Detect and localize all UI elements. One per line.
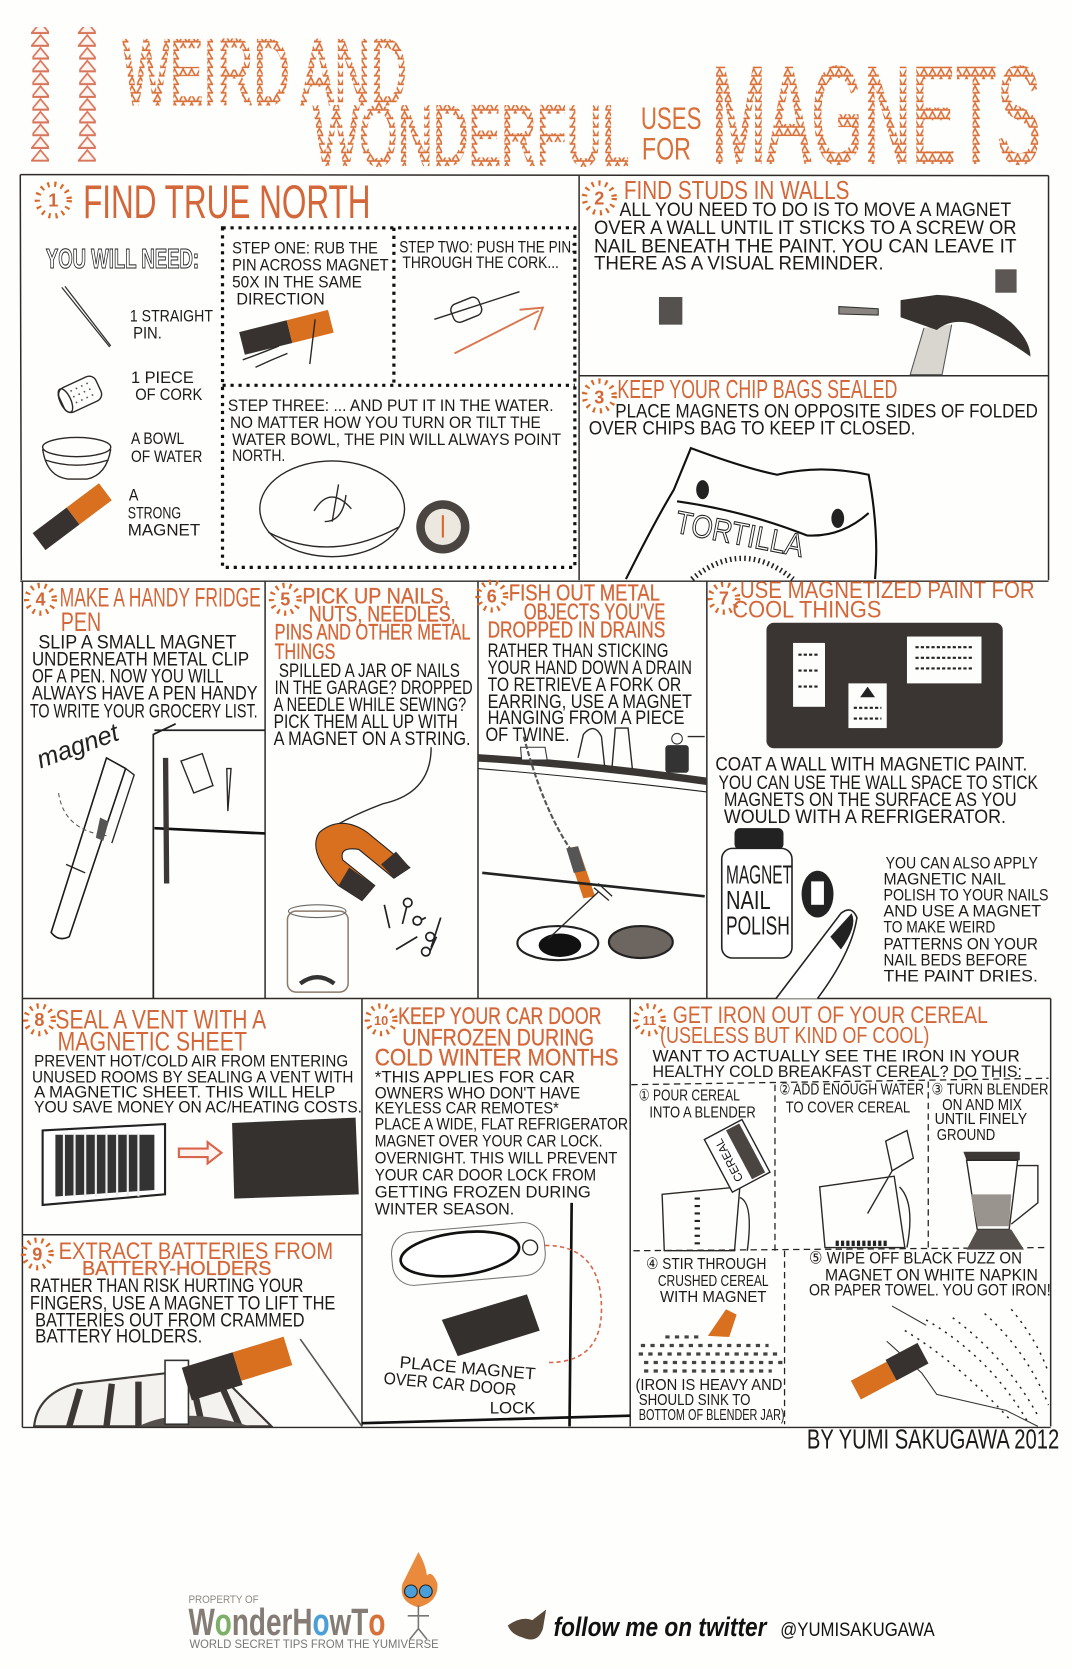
panel 4: fridge pen: [27, 583, 265, 998]
property of: PROPERTY OF: [188, 1594, 259, 1606]
body text: YOU SAVE MONEY ON AC/HEATING COSTS.: [34, 1097, 362, 1116]
body text: *THIS APPLIES FOR CAR: [375, 1068, 575, 1087]
jar: [287, 905, 348, 992]
nail polish bottle: MAGNET: [726, 861, 792, 889]
body text: THERE AS A VISUAL REMINDER.: [594, 253, 884, 274]
body text: SLIP A SMALL MAGNET: [38, 632, 237, 653]
step 3: ③ TURN BLENDER: [931, 1081, 1049, 1098]
step 4: BOTTOM OF BLENDER JAR): [639, 1407, 785, 1424]
body text: [594, 200, 1017, 274]
panel 5: pick up nails: [271, 584, 473, 992]
step 2: ② ADD ENOUGH WATER: [779, 1081, 924, 1098]
body text: IN THE GARAGE? DROPPED: [275, 678, 473, 699]
magnet caption: OVER CAR DOOR: [383, 1369, 517, 1399]
body text: [274, 661, 473, 750]
nails: [384, 898, 441, 956]
step one: 50X IN THE SAME: [232, 272, 362, 291]
heading: [55, 1004, 266, 1057]
title: [31, 27, 1038, 168]
magnet label: STRONG: [128, 503, 181, 522]
nail polish text: TO MAKE WEIRD: [884, 917, 995, 936]
step 4: CRUSHED CEREAL: [658, 1273, 769, 1290]
counter edge: [482, 873, 705, 896]
dotted step frames: [223, 228, 575, 567]
illustration: fridge: [153, 724, 265, 998]
arrow: [179, 1142, 221, 1163]
body text: HANGING FROM A PIECE: [488, 708, 684, 729]
step 1: CEREAL: [712, 1136, 746, 1184]
intro text: WANT TO ACTUALLY SEE THE IRON IN YOUR: [653, 1046, 1020, 1065]
dashed step grid: [631, 1078, 1049, 1424]
body text: OF A PEN. NOW YOU WILL: [32, 666, 224, 687]
badge 11: [636, 1006, 663, 1034]
heading: PICK UP NAILS,: [302, 584, 449, 609]
body text: A MAGNETIC SHEET. THIS WILL HELP: [34, 1082, 335, 1101]
pin label: [130, 306, 213, 342]
vent: [43, 1124, 165, 1205]
heading: [59, 1238, 333, 1280]
body text: KEYLESS CAR REMOTES*: [375, 1098, 559, 1117]
body text: OWNERS WHO DON'T HAVE: [375, 1084, 580, 1103]
body text: A NEEDLE WHILE SEWING?: [274, 695, 466, 716]
badge 3: 3: [594, 387, 604, 407]
icon: screw: [839, 307, 878, 315]
bowl label: OF WATER: [131, 447, 202, 466]
heading: DROPPED IN DRAINS: [488, 617, 665, 643]
heading: [660, 1002, 988, 1048]
body text: COAT A WALL WITH MAGNETIC PAINT.: [715, 755, 1027, 776]
heading: COLD WINTER MONTHS: [375, 1045, 618, 1072]
step two: STEP TWO: PUSH THE PIN:: [399, 237, 575, 256]
badge 11: 11: [643, 1013, 656, 1028]
step two: [399, 237, 575, 353]
cork label: OF CORK: [135, 385, 203, 404]
mascot: [402, 1552, 438, 1639]
magnet label: [128, 485, 200, 539]
magnet script label: magnet: [33, 718, 123, 774]
badge 2: [584, 183, 614, 213]
badge 7: 7: [719, 589, 729, 609]
step 4: WITH MAGNET: [660, 1289, 767, 1306]
step 5: MAGNET ON WHITE NAPKIN: [825, 1266, 1038, 1285]
body text: [30, 1276, 335, 1347]
badge 9: [23, 1240, 51, 1268]
twitter handle: @YUMISAKUGAWA: [780, 1620, 935, 1641]
body text: MAGNET OVER YOUR CAR LOCK.: [375, 1131, 603, 1150]
body text: A MAGNET ON A STRING.: [274, 729, 471, 750]
step 5: [809, 1249, 1051, 1426]
badge 2: 2: [594, 188, 604, 208]
magnet label: MAGNET: [128, 520, 200, 539]
cork label: 1 PIECE: [131, 368, 194, 387]
panel 1: find true north: [33, 176, 575, 567]
nail polish text: PATTERNS ON YOUR: [884, 934, 1038, 953]
string and horseshoe magnet: [316, 747, 431, 901]
footer: wonderhowto logo: [188, 1594, 439, 1651]
body text: OVER CHIPS BAG TO KEEP IT CLOSED.: [589, 418, 915, 439]
panel 7: magnetized paint: [710, 577, 1049, 998]
follow me on twitter: follow me on twitter: [554, 1612, 768, 1642]
door handle: [390, 1221, 547, 1287]
chip bag illustration: [626, 448, 876, 579]
body text: RATHER THAN RISK HURTING YOUR: [30, 1276, 303, 1297]
title line: wonderful: WONDERFUL: [313, 89, 629, 184]
heading: KEEP YOUR CAR DOOR: [398, 1003, 601, 1030]
title line: weird and: WEIRD AND: [122, 19, 407, 124]
heading: SEAL A VENT WITH A: [55, 1004, 266, 1034]
body text: OVERNIGHT. THIS WILL PREVENT: [375, 1148, 617, 1167]
body text: RATHER THAN STICKING: [488, 641, 669, 662]
title: uses: USES: [641, 100, 702, 136]
badge 1: 1: [48, 191, 58, 211]
magnet: [182, 1337, 294, 1400]
dashed arrow: [545, 1245, 601, 1363]
nail polish bottle: [722, 828, 792, 958]
body text: [375, 1068, 628, 1219]
comic panel grid: [20, 175, 1051, 1427]
icon: cork: [55, 374, 104, 415]
panel 8: seal a vent: [26, 1004, 362, 1205]
heading: UNFROZEN DURING: [402, 1024, 594, 1051]
badge 9: 9: [32, 1244, 42, 1264]
step three: STEP THREE: ... AND PUT IT IN THE WATER.: [228, 396, 554, 415]
body text: ALL YOU NEED TO DO IS TO MOVE A MAGNET: [620, 200, 1012, 221]
body text: BATTERY HOLDERS.: [35, 1326, 202, 1347]
body text: [30, 632, 258, 722]
step 1: INTO A BLENDER: [649, 1105, 756, 1122]
pin label: PIN.: [133, 323, 162, 342]
door edge: [362, 1203, 630, 1426]
twine and magnet: [524, 737, 595, 898]
chip bag illustration: TORTILLA: [673, 504, 807, 564]
nail polish text: THE PAINT DRIES.: [884, 966, 1038, 985]
badge 1: [37, 184, 69, 216]
body text: WINTER SEASON.: [375, 1200, 514, 1219]
step three: [228, 396, 561, 557]
heading: FIND TRUE NORTH: [83, 176, 370, 228]
step 3: ON AND MIX: [942, 1097, 1022, 1114]
badge 6: [478, 582, 506, 610]
body text: SPILLED A JAR OF NAILS: [279, 661, 460, 682]
body text: MAGNETS ON THE SURFACE AS YOU: [724, 790, 1017, 811]
panel 10: car door: [362, 1003, 630, 1426]
pin label: 1 STRAIGHT: [130, 306, 213, 325]
step one: PIN ACROSS MAGNET: [232, 255, 389, 274]
step 3: [931, 1081, 1049, 1250]
heading: [375, 1003, 618, 1072]
bowl label: A BOWL: [131, 429, 184, 448]
body text: [32, 1052, 362, 1116]
body text: PREVENT HOT/COLD AIR FROM ENTERING: [34, 1052, 348, 1071]
badge 5: [271, 585, 299, 613]
nail polish text: MAGNETIC NAIL: [884, 870, 1006, 889]
heading: KEEP YOUR CHIP BAGS SEALED: [617, 376, 897, 404]
icon: hammer: [901, 295, 1030, 375]
heading: (USELESS BUT KIND OF COOL): [660, 1022, 929, 1048]
body text: WOULD WITH A REFRIGERATOR.: [724, 807, 1006, 828]
body text: BATTERIES OUT FROM CRAMMED: [35, 1310, 304, 1331]
step 4: SHOULD SINK TO: [639, 1392, 750, 1409]
step 3: GROUND: [937, 1127, 995, 1144]
heading: EXTRACT BATTERIES FROM: [59, 1238, 333, 1265]
heading: MAGNETIC SHEET: [58, 1027, 247, 1057]
sink counter: [478, 728, 707, 792]
tagline: WORLD SECRET TIPS FROM THE YUMIVERSE: [190, 1638, 439, 1651]
magnetic sheet: [232, 1118, 359, 1199]
icon: magnet on wall: [995, 269, 1017, 293]
body text: OF TWINE.: [485, 725, 570, 746]
bird icon: [508, 1609, 546, 1640]
heading: THINGS: [275, 639, 335, 664]
icon: bowl: [43, 437, 111, 479]
body text: FINGERS, USE A MAGNET TO LIFT THE: [30, 1293, 335, 1314]
icon: pin: [62, 286, 111, 347]
magnet label: A: [129, 485, 139, 504]
panel 2: find studs in walls: [584, 177, 1030, 375]
heading: COOL THINGS: [732, 596, 881, 623]
step 5: ⑤ WIPE OFF BLACK FUZZ ON: [809, 1249, 1022, 1268]
body text: [485, 641, 692, 746]
body text: PICK THEM ALL UP WITH: [274, 712, 458, 733]
heading: MAKE A HANDY FRIDGE: [60, 583, 261, 613]
badge 5: 5: [280, 590, 290, 610]
step 1: [639, 1088, 770, 1251]
painted wall with notes: [766, 623, 1003, 748]
step one: DIRECTION: [236, 289, 325, 308]
badge 3: [584, 381, 614, 411]
icon: magnet: [659, 297, 682, 325]
step one: [232, 238, 389, 367]
step two: THROUGH THE CORK...: [402, 253, 559, 272]
badge 10: 10: [374, 1013, 388, 1028]
magnet caption: LOCK: [490, 1399, 536, 1418]
bowl label: [131, 429, 202, 466]
nail polish text: NAIL BEDS BEFORE: [884, 950, 1027, 969]
body text: PLACE A WIDE, FLAT REFRIGERATOR: [375, 1114, 628, 1133]
body text: GETTING FROZEN DURING: [375, 1183, 591, 1202]
heading: FISH OUT METAL: [509, 579, 660, 605]
badge 7: [710, 584, 738, 612]
badge 8: 8: [34, 1010, 44, 1030]
you will need: YOU WILL NEED:: [46, 243, 199, 274]
heading: NUTS, NEEDLES,: [309, 602, 456, 627]
nail polish text: [884, 854, 1049, 985]
icon: strong magnet: [33, 483, 112, 550]
nail polish text: YOU CAN ALSO APPLY: [886, 854, 1038, 873]
badge 4: 4: [35, 590, 46, 610]
step 3: UNTIL FINELY: [935, 1111, 1028, 1128]
heading: FIND STUDS IN WALLS: [624, 177, 849, 205]
heading: PINS AND OTHER METAL: [275, 620, 471, 645]
body text: TO RETRIEVE A FORK OR: [488, 675, 681, 696]
body text: YOUR CAR DOOR LOCK FROM: [375, 1165, 596, 1184]
heading: OBJECTS YOU'VE: [524, 599, 665, 625]
intro text: [653, 1046, 1022, 1081]
body text: UNDERNEATH METAL CLIP: [32, 649, 249, 670]
heading: [60, 583, 261, 637]
step 4: (IRON IS HEAVY AND: [636, 1377, 782, 1394]
title: for: FOR: [642, 131, 691, 167]
panel 9: batteries: [23, 1238, 362, 1426]
heading: GET IRON OUT OF YOUR CEREAL: [673, 1002, 988, 1029]
wordmark: WonderHowTo: [188, 1601, 385, 1644]
body text: [589, 401, 1038, 439]
body text: NAIL BENEATH THE PAINT. YOU CAN LEAVE IT: [594, 236, 1017, 257]
step 4: [636, 1256, 785, 1424]
badge 6: 6: [487, 586, 497, 606]
body text: EARRING, USE A MAGNET: [488, 692, 692, 713]
nail polish bottle: POLISH: [726, 913, 790, 941]
icon: big pen: [51, 758, 134, 939]
step 2: [779, 1081, 924, 1248]
magnet caption: [383, 1353, 536, 1418]
magnet caption: PLACE MAGNET: [399, 1353, 536, 1384]
step 4: ④ STIR THROUGH: [646, 1256, 766, 1273]
badge 8: [26, 1006, 53, 1034]
heading: [275, 584, 471, 664]
panel 11: iron in cereal: [631, 1002, 1051, 1426]
panel 3: chip bags: [584, 376, 1038, 579]
body text: TO WRITE YOUR GROCERY LIST.: [30, 701, 258, 722]
step 1: ① POUR CEREAL: [639, 1088, 740, 1105]
heading: [488, 579, 665, 643]
cork label: [131, 368, 203, 404]
heading: PEN: [61, 607, 101, 637]
nail polish bottle: NAIL: [726, 887, 771, 915]
step one: STEP ONE: RUB THE: [232, 238, 378, 257]
body text: YOUR HAND DOWN A DRAIN: [488, 658, 692, 679]
badge 10: [367, 1006, 395, 1034]
magnet and finger: [776, 871, 857, 998]
step three: NO MATTER HOW YOU TURN OR TILT THE: [230, 413, 541, 432]
battery holder illustration: [34, 1360, 271, 1426]
step 2: TO COVER CEREAL: [786, 1099, 910, 1116]
nail polish text: AND USE A MAGNET: [884, 901, 1041, 920]
diagonal edge: [300, 1339, 362, 1426]
step three: WATER BOWL, THE PIN WILL ALWAYS POINT: [232, 430, 561, 449]
body text: ALWAYS HAVE A PEN HANDY: [32, 683, 258, 704]
flat magnet: [442, 1294, 540, 1356]
heading: [732, 577, 1035, 623]
body text: UNUSED ROOMS BY SEALING A VENT WITH: [32, 1068, 353, 1087]
panel 6: drains: [478, 579, 707, 960]
step three: NORTH.: [232, 446, 285, 465]
badge 4: [27, 585, 54, 613]
fork and drain: [517, 883, 673, 960]
heading: BATTERY-HOLDERS: [82, 1258, 271, 1280]
intro text: HEALTHY COLD BREAKFAST CEREAL? DO THIS:: [653, 1062, 1022, 1081]
body text: OVER A WALL UNTIL IT STICKS TO A SCREW OR: [594, 218, 1017, 239]
body text: [715, 755, 1038, 828]
